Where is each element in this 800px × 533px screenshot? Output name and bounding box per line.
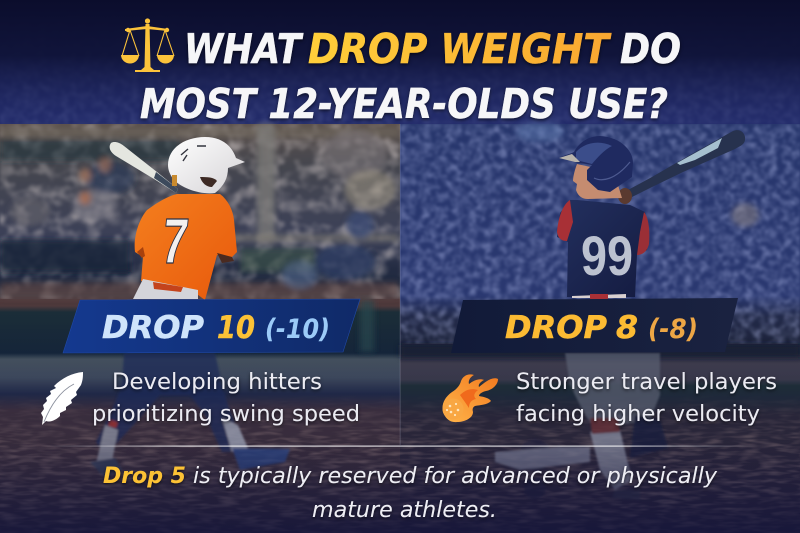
callout: Drop 10 banner: DROP [102,310,204,346]
text: Drop 10 description: prioritizing swing speed [92,402,360,427]
icon: balance scale [121,18,174,72]
callout: Drop 10 banner: (-10) [265,314,330,345]
callout: Drop 10 banner: 10 [217,310,255,346]
jersey [557,200,649,299]
icon: feather [41,372,83,425]
bottom darkening [0,440,800,533]
heading line 1: WHAT [184,25,304,73]
heading line 2: MOST 12-YEAR-OLDS USE? [140,80,668,128]
title [121,18,681,128]
footnote: Drop 5 [103,463,186,489]
jersey number 7: 7 [159,205,192,277]
left batter with bat, helmet and jersey 7 [110,137,245,300]
callout: Drop 8 banner: (-8) [648,314,698,345]
panel: left photo background [0,124,400,533]
callout: Drop 8 banner: 8 [616,310,638,346]
helmet [168,137,245,193]
callout: Drop 10 banner [63,299,360,353]
pants [133,279,198,299]
bat [628,130,745,197]
arm and hands [618,188,632,204]
footnote: mature athletes. [312,497,497,523]
right player lower body [495,353,668,500]
title: DO [620,25,681,73]
panel: shared dirt ground [0,405,800,530]
icon: flaming baseball [442,374,498,422]
text: Drop 8 description: facing higher velocity [516,402,760,427]
text: Drop 10 description [92,370,360,427]
face [573,164,622,199]
jersey [135,194,237,300]
jersey number 99: 99 [581,224,633,287]
left player lower body [90,353,290,478]
callout: Drop 8 banner [451,298,738,353]
footnote: is typically reserved for advanced or physically [193,463,718,489]
right batter with bat, helmet and jersey 99 [557,130,745,299]
bat [110,142,178,193]
text: Drop 10 description: Developing hitters [112,370,322,395]
footnote [103,463,718,523]
text: Drop 8 description [516,370,777,427]
panel: right photo background [400,122,800,533]
divider between photo panels [400,124,401,445]
helmet [559,136,633,192]
callout: Drop 8 banner: DROP [505,310,607,346]
title: DROP WEIGHT [308,25,612,73]
text: Drop 8 description: Stronger travel players [516,370,777,395]
